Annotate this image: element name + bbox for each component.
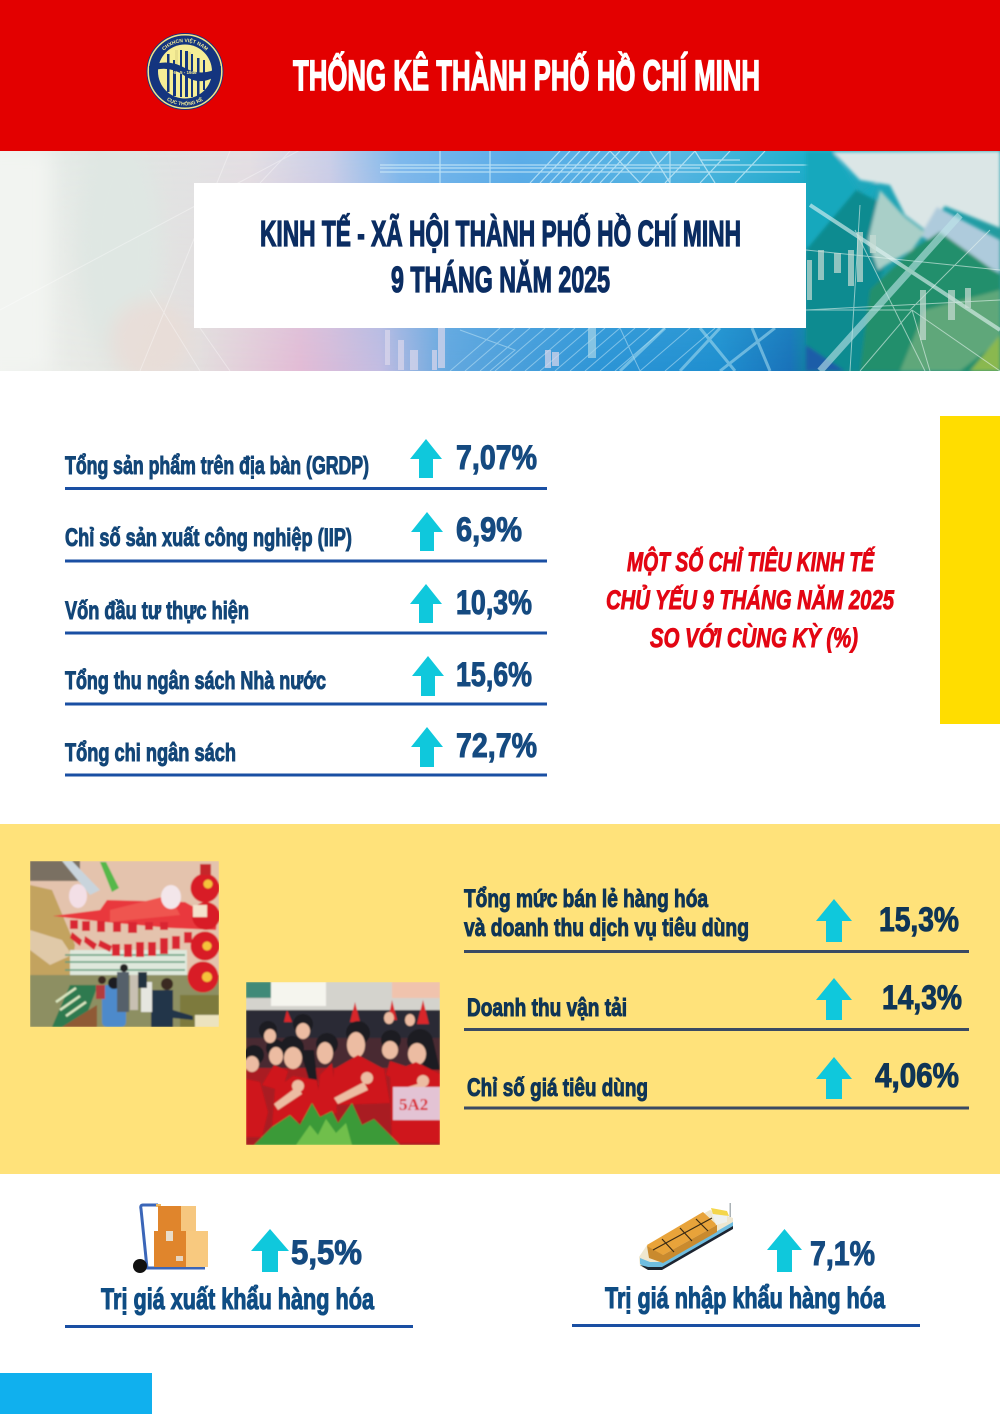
row: GRDP: 7,07%	[456, 439, 537, 477]
icon: statistics office logo: CỤC THỐNG KÊ	[167, 97, 204, 106]
photo: students singing	[244, 982, 440, 1145]
icon: statistics office logo	[146, 33, 224, 110]
panel: retail, transport, consumer prices	[0, 824, 1000, 1174]
row: budget expenditure: 72,7%	[456, 727, 537, 765]
row: budget revenue	[65, 656, 547, 706]
row: IIP	[65, 511, 547, 562]
row: budget revenue: 15,6%	[456, 656, 532, 694]
row: IIP: Chỉ số sản xuất công nghiệp (IIP)	[65, 524, 352, 552]
value: exports growth: 5,5%	[291, 1234, 362, 1272]
row: IIP: 6,9%	[456, 511, 522, 549]
row: budget revenue: Tổng thu ngân sách Nhà nước	[65, 667, 326, 695]
row: investment: Vốn đầu tư thực hiện	[65, 597, 249, 625]
photo: supermarket	[30, 861, 220, 1027]
row: budget expenditure: Tổng chi ngân sách	[65, 739, 236, 767]
row: GRDP: Tổng sản phẩm trên địa bàn (GRDP)	[65, 452, 369, 480]
banner: financial chart background	[0, 140, 1000, 380]
red heading: main indicators: SO VỚI CÙNG KỲ (%)	[650, 622, 858, 653]
row: GRDP	[65, 439, 547, 490]
icon: statistics office logo: CHXHCN VIỆT NAM	[162, 38, 208, 50]
arrow up	[767, 1229, 802, 1272]
row: transport revenue: Doanh thu vận tải	[467, 994, 627, 1022]
red heading: main indicators: MỘT SỐ CHỈ TIÊU KINH TẾ	[627, 545, 875, 577]
row: retail sales: Tổng mức bán lẻ hàng hóa	[464, 885, 709, 913]
row: consumer price index: 4,06%	[875, 1057, 959, 1095]
arrow up	[251, 1229, 289, 1272]
value: imports growth: 7,1%	[810, 1235, 875, 1273]
row: retail sales	[464, 885, 969, 953]
panel: exports	[65, 1204, 413, 1328]
label: exports: Trị giá xuất khẩu hàng hóa	[101, 1283, 374, 1316]
header band	[0, 0, 1000, 151]
row: consumer price index	[464, 1057, 969, 1110]
label: imports: Trị giá nhập khẩu hàng hóa	[605, 1282, 885, 1315]
yellow side tab	[940, 416, 1000, 724]
row: transport revenue	[464, 978, 969, 1031]
row: transport revenue: 14,3%	[882, 979, 962, 1017]
icon: container ship	[639, 1203, 733, 1270]
panel: imports	[572, 1203, 920, 1327]
title box: 9 THÁNG NĂM 2025	[391, 259, 610, 300]
icon: statistics office logo: 6 - 5 - 1946	[173, 70, 197, 75]
row: retail sales: 15,3%	[879, 901, 959, 939]
icon: hand truck with boxes	[133, 1204, 208, 1273]
photo: students singing: 5A2	[399, 1095, 428, 1114]
row: consumer price index: Chỉ số giá tiêu dùng	[467, 1074, 648, 1102]
title box	[194, 183, 806, 328]
title box: KINH TẾ - XÃ HỘI THÀNH PHỐ HỒ CHÍ MINH	[260, 212, 741, 254]
red heading: main indicators	[606, 545, 895, 653]
row: investment: 10,3%	[456, 584, 532, 622]
panel: key indicators	[65, 439, 547, 776]
row: investment	[65, 584, 547, 634]
row: budget expenditure	[65, 727, 547, 776]
red heading: main indicators: CHỦ YẾU 9 THÁNG NĂM 2025	[606, 583, 895, 615]
blue corner tab	[0, 1373, 152, 1414]
row: retail sales: và doanh thu dịch vụ tiêu dùng	[464, 914, 749, 942]
